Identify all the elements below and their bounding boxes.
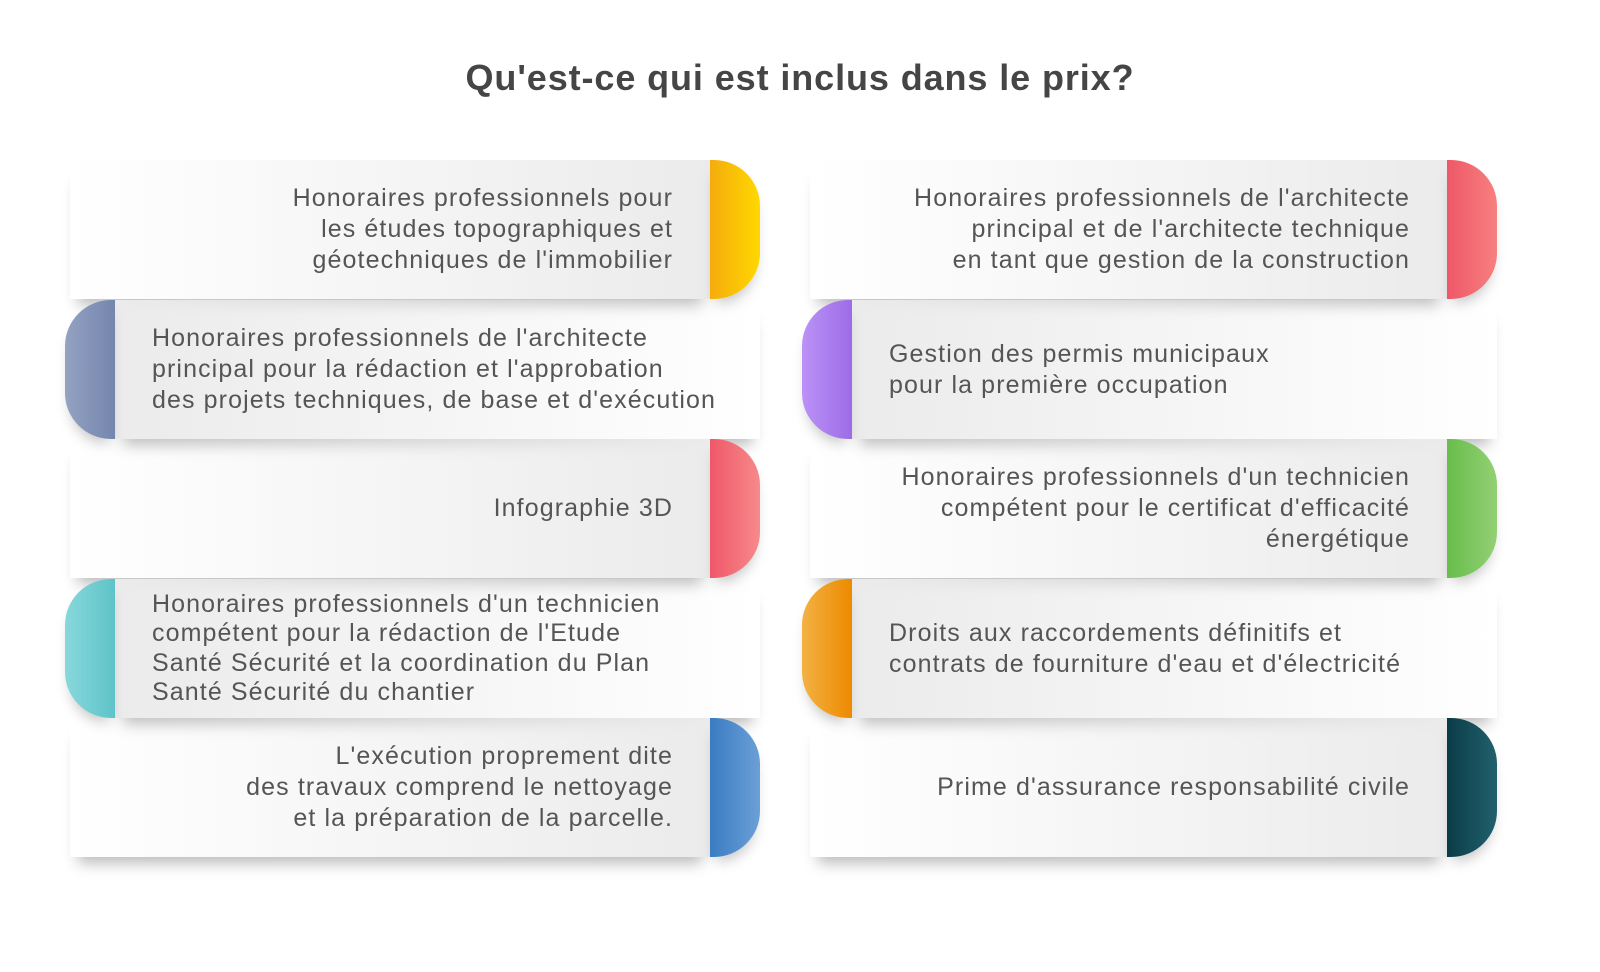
text: architect projects: Honoraires professionnels de l'architecte <box>152 324 648 352</box>
text: 3D: Infographie 3D <box>494 494 673 522</box>
text: construction management: principal et de l'architecte technique <box>972 215 1410 243</box>
cap: blue <box>710 718 760 857</box>
text: permits: pour la première occupation <box>889 370 1229 398</box>
cap: purple <box>802 300 852 439</box>
text: topographic: géotechniques de l'immobilier <box>313 246 673 274</box>
cap: slate blue <box>65 300 115 439</box>
text: safety study: Santé Sécurité du chantier <box>152 678 475 706</box>
cap: orange <box>802 579 852 718</box>
text: safety study: Santé Sécurité et la coordination du Plan <box>152 648 650 676</box>
text: insurance: Prime d'assurance responsabilité civile <box>937 773 1410 801</box>
text: execution <box>246 742 673 832</box>
card: connections <box>800 579 1498 732</box>
text: construction management: Honoraires professionnels de l'architecte <box>914 184 1410 212</box>
text: execution: et la préparation de la parcelle. <box>293 804 673 832</box>
card: architect projects <box>64 300 760 453</box>
text: architect projects: principal pour la rédaction et l'approbation <box>152 355 664 383</box>
text: safety study: compétent pour la rédaction de l'Etude <box>152 619 621 647</box>
text: execution: L'exécution proprement dite <box>336 742 673 770</box>
text: architect projects <box>152 324 716 414</box>
card: energy certificate <box>810 439 1498 592</box>
card: construction management <box>810 160 1498 313</box>
text: construction management: en tant que gestion de la construction <box>953 246 1410 274</box>
card: 3D <box>70 439 762 592</box>
text: construction management <box>914 184 1410 274</box>
text: connections: Droits aux raccordements définitifs et <box>889 618 1342 646</box>
text: energy certificate: Honoraires professionnels d'un technicien <box>902 463 1410 491</box>
text: energy certificate: compétent pour le certificat d'efficacité <box>941 494 1410 522</box>
card: execution <box>70 718 762 872</box>
cap: red <box>710 439 760 578</box>
text: architect projects: des projets techniques, de base et d'exécution <box>152 386 716 414</box>
text: energy certificate <box>902 463 1410 553</box>
card: safety study <box>64 579 760 732</box>
text: topographic: les études topographiques et <box>321 215 673 243</box>
cap: yellow <box>710 160 760 299</box>
text: execution: des travaux comprend le nettoyage <box>246 773 673 801</box>
text: topographic: Honoraires professionnels pour <box>293 184 673 212</box>
text: connections <box>889 618 1401 678</box>
text: connections: contrats de fourniture d'eau et d'électricité <box>889 650 1401 678</box>
cap: pink red <box>1447 160 1497 299</box>
cap: dark teal <box>1447 718 1497 857</box>
title: Qu'est-ce qui est inclus dans le prix? <box>466 57 1134 98</box>
text: permits <box>889 340 1270 398</box>
card: insurance <box>810 718 1498 872</box>
text: energy certificate: énergétique <box>1266 525 1410 553</box>
text: safety study <box>152 590 660 706</box>
card: permits <box>800 300 1498 454</box>
text: topographic <box>293 184 673 274</box>
text: permits: Gestion des permis municipaux <box>889 340 1270 368</box>
cap: teal <box>65 579 115 718</box>
cap: green <box>1447 439 1497 578</box>
card: topographic <box>70 160 762 313</box>
text: safety study: Honoraires professionnels d'un technicien <box>152 590 660 618</box>
